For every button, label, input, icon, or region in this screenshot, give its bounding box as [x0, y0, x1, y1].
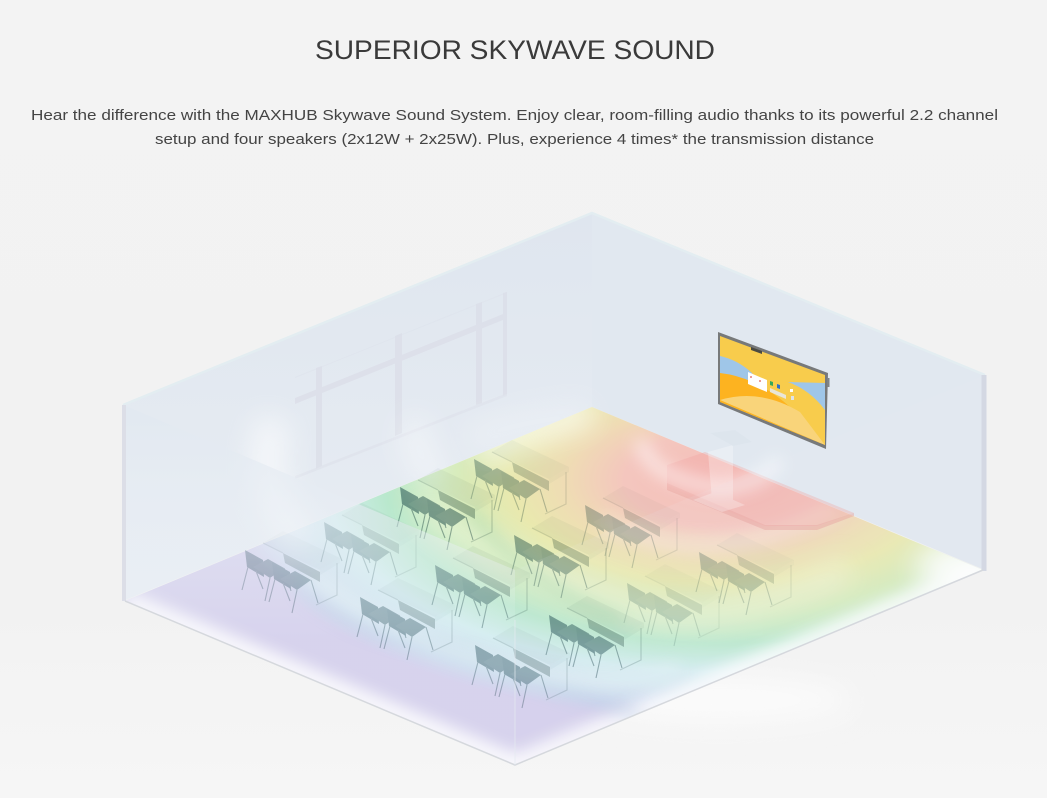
sound ring arcs [332, 612, 640, 720]
stage platform [667, 452, 854, 530]
near left wall glass [123, 405, 515, 765]
intro text: setup and four speakers (2x12W + 2x25W). Plus, experience 4 times* the transmission distance [155, 131, 874, 148]
sound waves in air [267, 415, 780, 540]
podium [693, 430, 752, 512]
intro text [31, 107, 998, 148]
soft floor edge [125, 570, 983, 765]
near right wall glass [515, 375, 985, 765]
back right wall [592, 213, 985, 570]
glow beneath room [590, 678, 850, 722]
back left wall [123, 213, 592, 601]
classroom illustration [100, 213, 1035, 780]
intro text: Hear the difference with the MAXHUB Skywave Sound System. Enjoy clear, room-filling audio thanks to its powerful 2.2 channel [31, 107, 998, 124]
display panel [718, 332, 830, 449]
wall edges [124, 375, 984, 765]
wall top edges [123, 213, 985, 405]
window [295, 292, 507, 479]
desks and chairs [242, 440, 794, 708]
title: SUPERIOR SKYWAVE SOUND [315, 35, 715, 65]
floor heatmap [126, 407, 981, 754]
